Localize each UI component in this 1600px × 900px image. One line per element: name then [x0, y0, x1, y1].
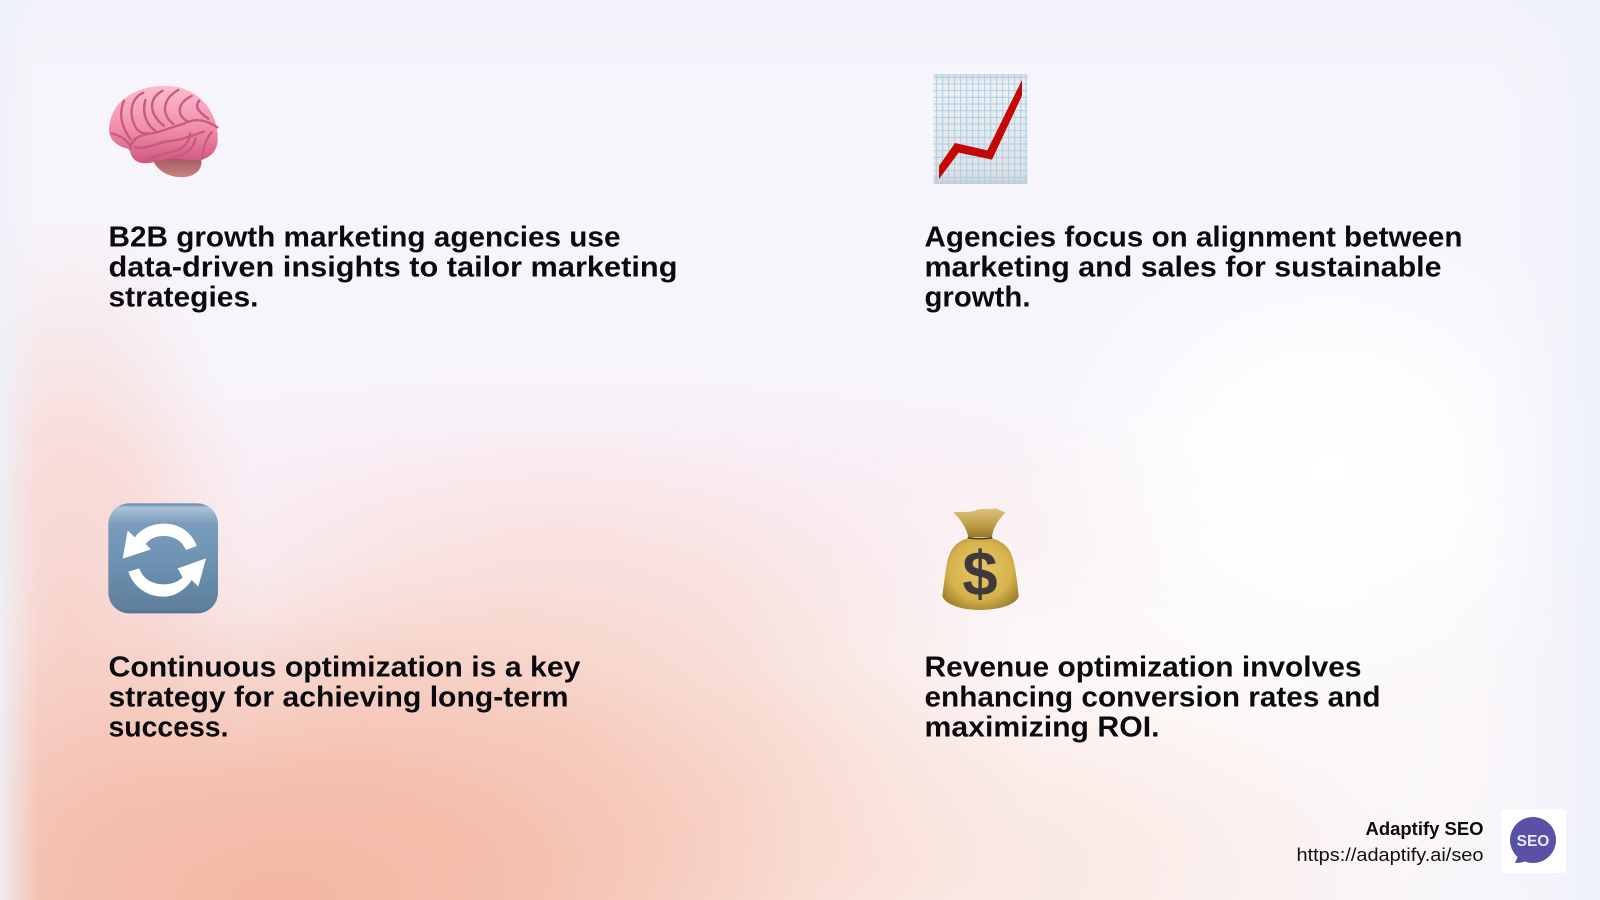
brand url: https://adaptify.ai/seo: [1296, 845, 1484, 865]
text block: strategies.: [108, 282, 258, 314]
text block: [108, 222, 678, 314]
logo tile: SEO: [1517, 833, 1549, 850]
text block: Continuous optimization is a key: [108, 652, 580, 684]
panel: marketing and sales alignment: [924, 74, 1462, 314]
text block: success.: [108, 712, 228, 744]
text block: growth.: [924, 282, 1030, 314]
text block: [924, 652, 1380, 744]
text block: data-driven insights to tailor marketing: [108, 252, 678, 284]
panel: continuous optimization: [108, 503, 580, 744]
panel: data-driven insights: [108, 86, 678, 314]
panel: revenue optimization: [924, 508, 1380, 744]
text block: strategy for achieving long-term: [108, 682, 568, 714]
icon: chart increasing: [934, 74, 1027, 184]
text block: [108, 652, 580, 744]
text block: marketing and sales for sustainable: [924, 252, 1442, 284]
footer brand: [1296, 809, 1566, 873]
icon: money bag: $: [962, 539, 998, 609]
brand name: Adaptify SEO: [1366, 819, 1484, 839]
icon: sync arrows: [108, 503, 218, 613]
text block: enhancing conversion rates and: [924, 682, 1380, 714]
icon: money bag: [942, 508, 1019, 610]
text block: maximizing ROI.: [924, 712, 1160, 744]
text block: [924, 222, 1462, 314]
icon: brain: [109, 86, 218, 177]
text block: Revenue optimization involves: [924, 652, 1362, 684]
logo tile: [1501, 809, 1566, 873]
text block: B2B growth marketing agencies use: [108, 222, 620, 254]
text block: Agencies focus on alignment between: [924, 222, 1462, 254]
